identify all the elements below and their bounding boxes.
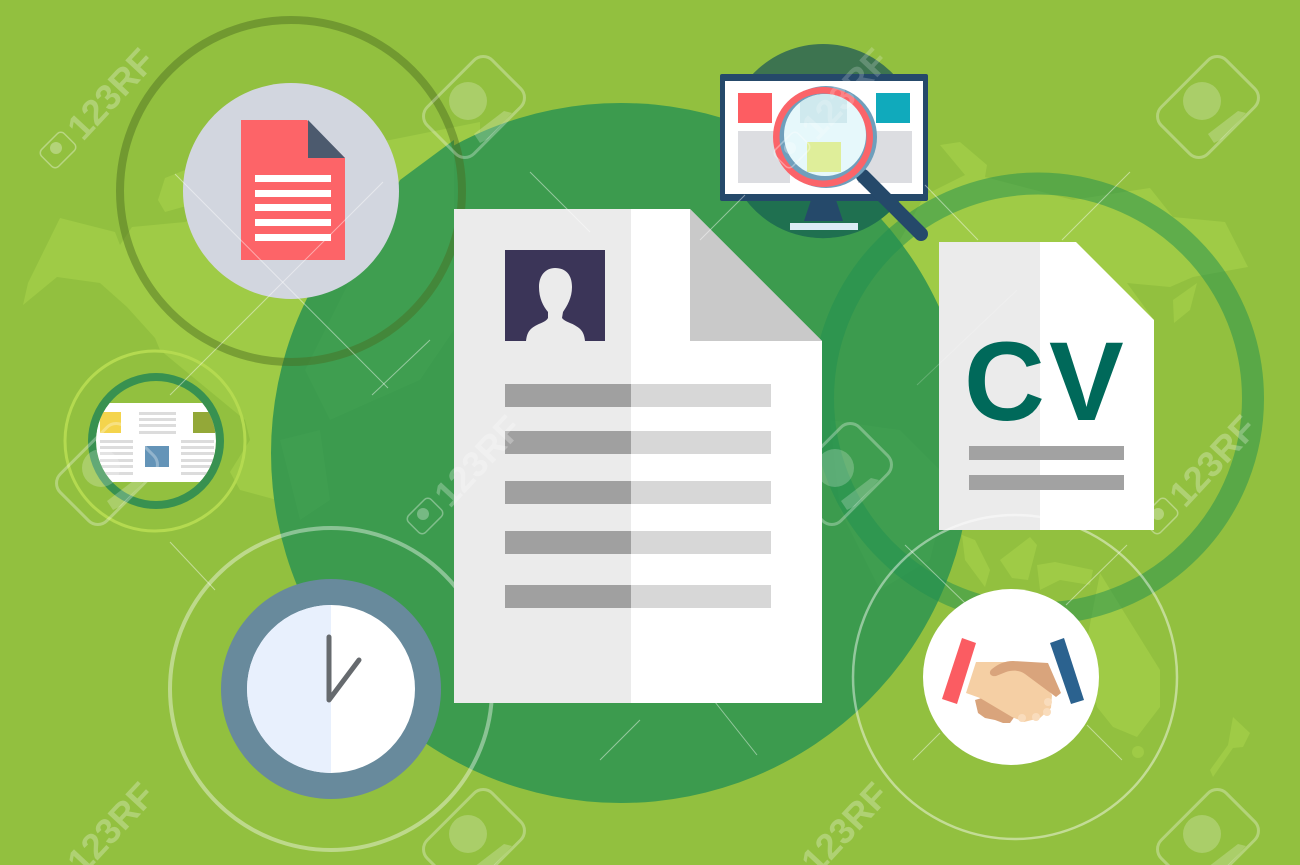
document lines [255, 175, 331, 241]
grey blocks [738, 131, 790, 183]
clock hands [329, 637, 359, 700]
fingertips [1018, 698, 1052, 722]
panel: document icon [120, 20, 462, 362]
CV text lines [969, 446, 1124, 490]
outer thin ring [65, 351, 245, 531]
grey disc [183, 83, 399, 299]
watermark text: 123RF [59, 40, 163, 147]
small watermark cameras [38, 130, 1180, 865]
CV heading: C [964, 319, 1045, 444]
map tint on green circle [280, 140, 950, 590]
clock face shade [247, 605, 331, 773]
magnifier handle [863, 176, 921, 234]
blue cuff [1050, 638, 1084, 704]
large green ring right [823, 184, 1253, 614]
text bars [505, 384, 771, 608]
upper hand [990, 661, 1061, 697]
clock outer ring [170, 528, 492, 850]
handshake outer ring [853, 515, 1177, 839]
watermark text: 123RF [426, 407, 530, 514]
page left shade [454, 209, 631, 703]
screen [725, 81, 923, 194]
lower hand fingers [975, 697, 1015, 723]
white disc [923, 589, 1099, 765]
monitor stand [804, 200, 843, 221]
photo placeholder [505, 250, 605, 341]
highlighted blocks [800, 93, 847, 172]
panel: newspaper icon [65, 351, 245, 531]
thin radial lines [170, 172, 1130, 760]
watermark text: 123RF [1161, 407, 1265, 514]
clock bezel [221, 579, 441, 799]
monitor frame [720, 74, 928, 201]
front hand [966, 662, 1052, 722]
red block [738, 93, 772, 123]
panel: clock icon [170, 528, 492, 850]
teal block [876, 93, 910, 123]
CV page [939, 242, 1154, 530]
main resume document [454, 209, 822, 703]
CV document [939, 242, 1154, 530]
monitor base [790, 223, 858, 230]
red cuff [942, 638, 976, 704]
clock face [247, 605, 415, 773]
newspaper clipped in circle [90, 403, 220, 482]
panel: monitor with magnifier [720, 44, 928, 238]
red document [241, 120, 345, 260]
document fold [308, 120, 345, 158]
dark green ring [92, 377, 220, 505]
magnifier lens [784, 94, 866, 176]
magnifier rim [775, 86, 877, 188]
outer ring top-left [120, 20, 462, 362]
watermark text: 123RF [793, 40, 897, 147]
monitor backdrop circle [726, 44, 920, 238]
world map background [23, 122, 1250, 777]
page fold [690, 209, 822, 341]
large green circle [271, 103, 971, 803]
CV page shade [939, 242, 1040, 530]
panel: handshake icon [853, 515, 1177, 839]
page [454, 209, 822, 703]
CV heading: V [1049, 319, 1124, 444]
